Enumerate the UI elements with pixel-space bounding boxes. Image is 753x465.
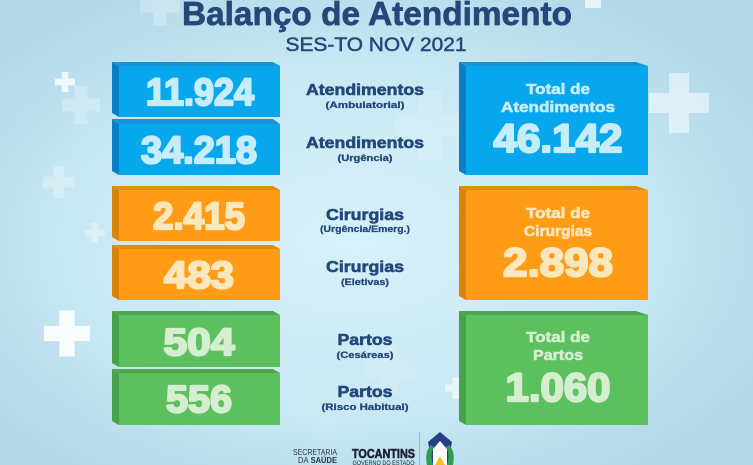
panel: total de cirurgias: Cirurgias xyxy=(524,223,592,240)
tocantins: TOCANTINS xyxy=(352,446,415,461)
panel: total de cirurgias: 2.898 xyxy=(503,241,613,285)
label: atendimentos ambulatorial: (Ambulatorial) xyxy=(326,100,404,111)
panel: total de atendimentos: Atendimentos xyxy=(501,99,615,116)
label: partos cesáreas: Partos xyxy=(338,332,393,349)
panel: cirurgias eletivas xyxy=(112,245,280,300)
label: cirurgias eletivas: (Eletivas) xyxy=(341,277,389,288)
panel: total de cirurgias xyxy=(459,186,648,300)
secretaria da saúde: SECRETARIA xyxy=(293,447,337,457)
label: partos risco habitual: (Risco Habitual) xyxy=(322,402,408,413)
panel: cirurgias urgência xyxy=(112,186,280,241)
label: atendimentos urgência xyxy=(306,135,424,164)
footer logos xyxy=(293,432,454,465)
label: atendimentos ambulatorial: Atendimentos xyxy=(306,82,424,99)
secretaria da saúde xyxy=(293,447,337,465)
panel: partos cesáreas xyxy=(112,311,280,367)
subtitle: SES-TO NOV 2021 xyxy=(286,34,466,56)
label: atendimentos urgência: (Urgência) xyxy=(338,153,392,164)
panel: total de atendimentos: Total de xyxy=(526,81,590,98)
panel: partos risco habitual: 556 xyxy=(166,379,232,421)
panel: atendimentos urgência: 34.218 xyxy=(141,130,257,172)
panel: atendimentos urgência xyxy=(112,119,280,175)
divider xyxy=(419,432,420,465)
panel: total de partos: 1.060 xyxy=(506,366,610,410)
panel: total de atendimentos xyxy=(459,62,648,175)
panel: partos risco habitual xyxy=(112,369,280,425)
label: cirurgias urgência xyxy=(320,207,410,235)
panel: total de partos: Total de xyxy=(526,329,590,346)
panel: total de partos xyxy=(459,311,648,425)
label: partos risco habitual: Partos xyxy=(338,384,393,401)
panel: cirurgias eletivas: 483 xyxy=(164,255,234,297)
label: atendimentos ambulatorial xyxy=(306,82,424,111)
icon: coat of arms xyxy=(426,432,454,465)
secretaria da saúde: DA SAÚDE xyxy=(298,454,337,465)
label: cirurgias eletivas xyxy=(326,259,404,288)
label: partos cesáreas: (Cesáreas) xyxy=(336,350,394,361)
panel: total de cirurgias: Total de xyxy=(526,205,590,222)
panel: partos cesáreas: 504 xyxy=(164,322,234,364)
tocantins xyxy=(352,446,415,465)
panel: total de atendimentos: 46.142 xyxy=(494,117,622,161)
label: partos cesáreas xyxy=(336,332,394,361)
label: cirurgias eletivas: Cirurgias xyxy=(326,259,404,276)
label: atendimentos urgência: Atendimentos xyxy=(306,135,424,152)
panel: atendimentos ambulatorial: 11.924 xyxy=(146,72,254,114)
panel: cirurgias urgência: 2.415 xyxy=(153,196,245,238)
panel: atendimentos ambulatorial xyxy=(112,62,280,117)
label: cirurgias urgência: (Urgência/Emerg.) xyxy=(320,224,410,235)
label: cirurgias urgência: Cirurgias xyxy=(326,207,404,224)
panel: total de partos: Partos xyxy=(533,347,583,364)
label: partos risco habitual xyxy=(322,384,408,413)
